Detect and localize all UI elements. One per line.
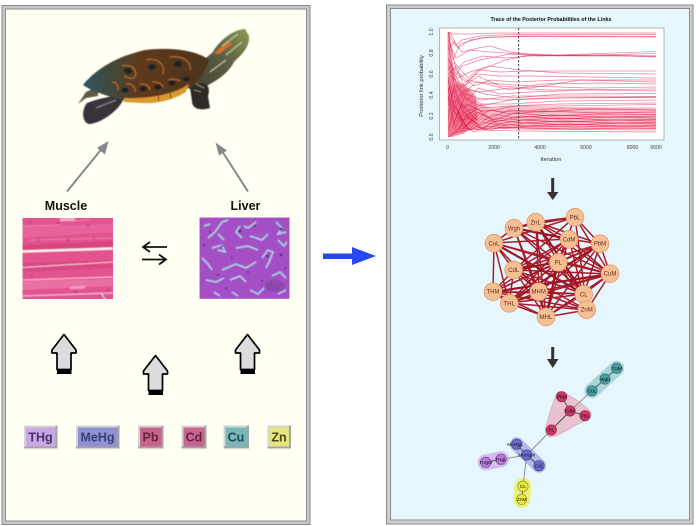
module node labels: THgM (479, 460, 492, 466)
chip: Cd: Cd (186, 430, 202, 444)
arrow base: middle block arrow (148, 390, 163, 395)
y axis ticks: 0.2 (429, 112, 435, 120)
network node labels: PbL (570, 215, 581, 221)
chip: Pb (138, 426, 164, 448)
yellow module nodes (516, 481, 528, 504)
module node labels: CL (520, 484, 526, 490)
turtle shell spots (122, 61, 190, 93)
arrow: muscle to turtle (67, 141, 108, 192)
network: full link graph (484, 208, 619, 326)
arrows: bidirectional exchange (142, 242, 167, 264)
turtle front leg (190, 83, 210, 109)
turtle tail (78, 86, 98, 104)
chip: MeHg (76, 426, 120, 448)
y axis ticks: 0.4 (429, 91, 435, 99)
module node labels: PbM (557, 394, 567, 400)
chart convergence marker (518, 28, 520, 140)
module node labels (479, 366, 622, 503)
module node labels: CdM (565, 409, 575, 415)
x axis ticks: 9000 (650, 145, 662, 151)
module node labels: CdL (535, 463, 544, 469)
module edges (486, 368, 617, 499)
network node labels: CL (580, 292, 588, 298)
x axis ticks: 0 (446, 145, 449, 151)
arrow: muscle to liver (142, 254, 166, 264)
chip: THg (24, 426, 58, 448)
label: Muscle: Muscle (45, 199, 87, 213)
network node labels: ZnM (581, 308, 593, 314)
chart dense band (448, 84, 656, 136)
network node labels: PL (555, 260, 563, 266)
arrow: trace to network (547, 178, 558, 200)
network node labels: CuM (604, 272, 616, 278)
chart: trace of posterior link probabilities (419, 17, 664, 163)
y axis ticks: 0.6 (429, 70, 435, 78)
chip: Pb: Pb (143, 430, 159, 444)
network nodes (484, 208, 619, 326)
red module nodes (546, 392, 590, 435)
module node labels: PbL (581, 413, 590, 419)
arrow: middle block arrow (144, 356, 168, 390)
turtle shell markings (112, 57, 190, 92)
chip: Zn (268, 426, 291, 448)
network node labels: Wgh (508, 226, 520, 232)
chip: THg: THg (28, 430, 53, 444)
network node labels: ZnL (531, 220, 542, 226)
chart trace lines (448, 32, 656, 137)
panel: right analysis workflow (386, 5, 693, 524)
blue module nodes (512, 439, 544, 471)
network node labels (486, 215, 616, 321)
arrow: blue main flow (323, 247, 376, 265)
y axis ticks: 0.0 (429, 133, 435, 141)
y axis ticks (429, 28, 435, 141)
network node labels: MHL (540, 315, 553, 321)
y axis ticks: 1.0 (429, 28, 435, 36)
chip: MeHg: MeHg (80, 430, 115, 444)
arrow: left block arrow (52, 334, 76, 370)
network node labels: CdL (508, 268, 520, 274)
module node labels: MeHgM (518, 453, 535, 459)
panel: left sources and tissues (2, 6, 310, 524)
chip: Zn: Zn (271, 430, 287, 444)
module node labels: PL (548, 428, 555, 434)
network node labels: CuL (488, 241, 500, 247)
label: Liver: Liver (231, 199, 261, 213)
turtle neck and head (186, 29, 249, 92)
network node labels: PbM (594, 242, 606, 248)
arrow: liver to turtle (216, 142, 248, 192)
network: clustered modules (479, 363, 622, 504)
y axis ticks: 0.8 (429, 49, 435, 57)
arrow: right block arrow (236, 334, 260, 370)
y axis title: Posterior link probability (419, 55, 425, 117)
arrow: network to clusters (547, 347, 558, 368)
x axis title: Iteration (541, 157, 561, 163)
x axis ticks: 6000 (580, 145, 592, 151)
teal module nodes (587, 363, 622, 396)
chip: Cu: Cu (228, 430, 244, 444)
x axis ticks: 8000 (627, 145, 638, 151)
module hulls (486, 368, 617, 499)
module node labels: CuL (588, 388, 597, 394)
chart title: Trace of the Posterior Probabilities of the Links (490, 17, 612, 23)
arrow base: right block arrow (240, 369, 255, 374)
image: liver tissue (199, 217, 290, 299)
purple module nodes (480, 454, 506, 467)
network node labels: CdM (563, 237, 575, 243)
module node labels: Wgh (600, 377, 610, 383)
x axis ticks (446, 145, 662, 151)
turtle rear leg (83, 95, 125, 124)
module node labels: ZnM (517, 497, 527, 503)
module node labels: MeHgL (507, 442, 523, 448)
x axis ticks: 2000 (488, 145, 500, 151)
arrow base: left block arrow (57, 369, 72, 374)
chip: Cu (224, 426, 249, 448)
x axis ticks: 4000 (534, 145, 546, 151)
arrow: liver to muscle (143, 242, 167, 252)
turtle head stripe (214, 41, 232, 54)
image: muscle tissue (22, 217, 114, 300)
network node labels: MHM (532, 290, 546, 296)
chip: Cd (182, 426, 206, 448)
network node labels: THL (504, 301, 516, 307)
network node labels: THM (486, 290, 500, 296)
icon: turtle (78, 29, 249, 124)
module node labels: CuM (612, 366, 622, 372)
turtle plastron (124, 84, 189, 103)
module node labels: THgL (495, 457, 507, 463)
network edges (493, 217, 610, 317)
turtle shell (83, 49, 209, 100)
chart band trace lines (452, 100, 656, 134)
chart dense spike (448, 32, 478, 137)
chart plot area (440, 28, 664, 140)
turtle head detail (210, 34, 242, 72)
